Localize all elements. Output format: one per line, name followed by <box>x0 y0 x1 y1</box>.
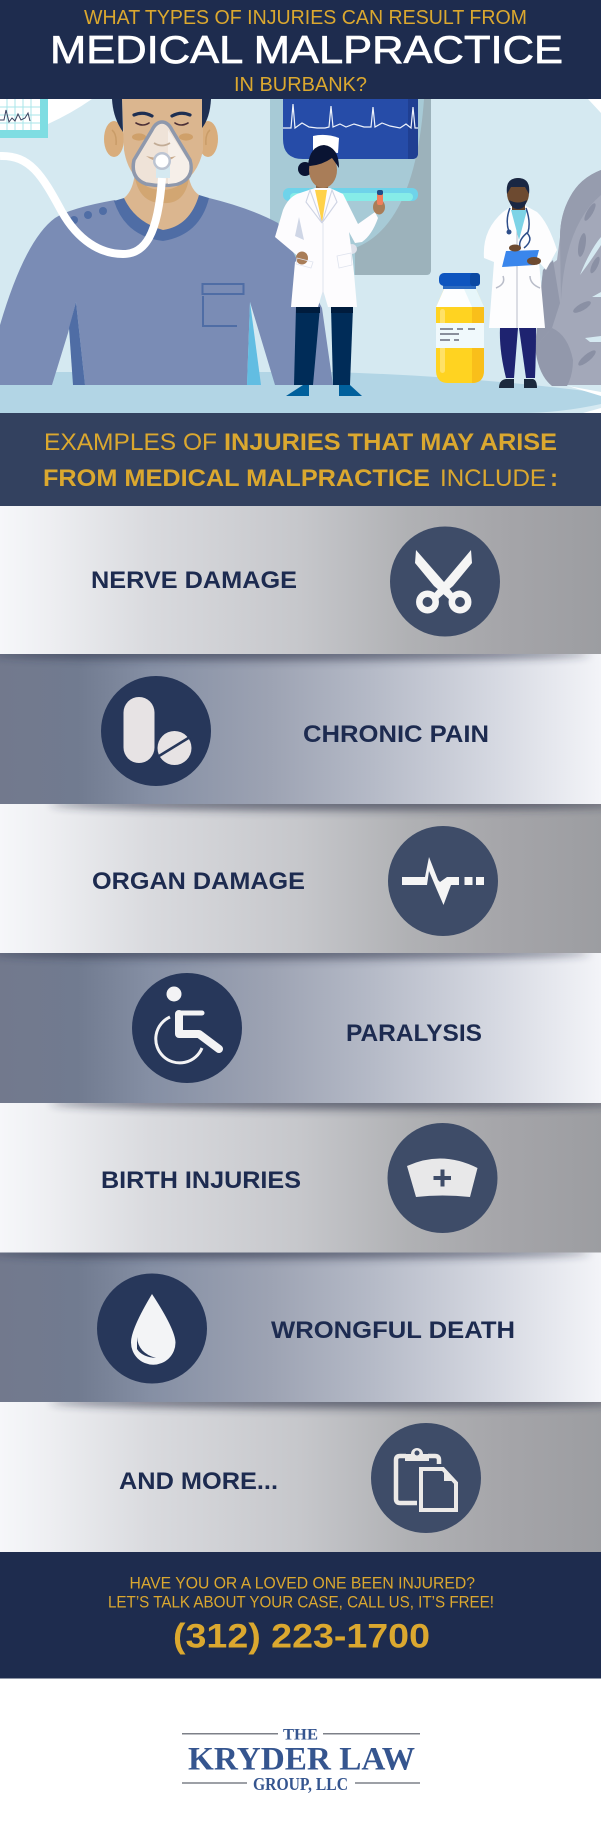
heading line one: EXAMPLES OF <box>44 429 217 456</box>
illustration: hospital scene <box>0 99 601 413</box>
band: organ damage <box>0 798 601 953</box>
label: chronic pain: CHRONIC PAIN <box>303 721 489 748</box>
label: and more: AND MORE... <box>119 1468 278 1495</box>
band: nerve damage <box>0 506 601 654</box>
label: birth injuries: BIRTH INJURIES <box>101 1167 301 1194</box>
doctor <box>484 178 557 388</box>
band: paralysis <box>0 947 601 1103</box>
oxygen tube <box>0 156 162 254</box>
band: chronic pain <box>0 648 601 804</box>
wall chart: ECG <box>0 99 48 138</box>
icon: blood drop <box>97 1274 207 1384</box>
nurse <box>275 135 385 396</box>
section heading panel: INJURIES THAT MAY ARISE <box>224 429 557 456</box>
nurse neck and face <box>316 186 328 188</box>
cyan shelf <box>283 188 418 201</box>
header banner <box>0 0 601 99</box>
icon: nurse hat <box>388 1123 498 1233</box>
heading line two: FROM MEDICAL MALPRACTICE <box>43 465 430 492</box>
footer call to action: LET’S TALK ABOUT YOUR CASE, CALL US, IT’S FREE! <box>108 1594 494 1612</box>
logo: The Kryder Law Group <box>182 1726 420 1794</box>
logo: The Kryder Law Group: GROUP, LLC <box>253 1774 348 1794</box>
monitor wall panel <box>270 99 431 275</box>
shoulder dots <box>99 207 107 215</box>
clipboard <box>502 250 539 267</box>
band: wrongful death <box>0 1246 601 1402</box>
nurse yellow shirt <box>315 190 327 223</box>
patient eyes and brows <box>134 113 190 125</box>
patient ears and head <box>104 121 124 157</box>
label: paralysis: PARALYSIS <box>346 1020 482 1047</box>
section heading panel <box>0 413 601 506</box>
doctor pants <box>500 328 518 378</box>
floor <box>0 372 601 413</box>
monitor ECG trace <box>283 104 418 128</box>
monitor screen <box>283 99 418 159</box>
title: medical malpractice: MEDICAL MALPRACTICE <box>50 29 563 72</box>
icon: pills <box>101 676 211 786</box>
phone number: (312) 223-1700 <box>173 1618 430 1656</box>
band: birth injuries <box>0 1097 601 1252</box>
doctor head <box>512 205 525 210</box>
section heading panel: INCLUDE <box>440 465 546 492</box>
logo: The Kryder Law Group: KRYDER LAW <box>188 1741 415 1777</box>
label: nerve damage: NERVE DAMAGE <box>91 567 297 594</box>
nurse shoes <box>286 385 309 396</box>
icon: wheelchair <box>132 973 242 1083</box>
patient <box>0 99 333 385</box>
bottle cap <box>443 286 476 289</box>
title line: in Burbank: IN BURBANK? <box>234 74 367 96</box>
shirt pocket <box>202 284 244 326</box>
label: organ damage: ORGAN DAMAGE <box>92 868 305 895</box>
bottle label <box>436 323 484 348</box>
nurse hair bun <box>298 162 310 176</box>
oxygen mask <box>133 122 191 186</box>
doctor coat <box>484 206 557 328</box>
icon: scissors <box>390 526 500 636</box>
nurse cap <box>313 135 339 153</box>
title line: what types of injuries: WHAT TYPES OF INJURIES CAN RESULT FROM <box>84 7 527 29</box>
footer call to action <box>0 1552 601 1678</box>
band: and more <box>0 1396 601 1552</box>
patient collar <box>114 195 209 241</box>
call to action text: HAVE YOU OR A LOVED ONE BEEN INJURED? <box>130 1574 475 1592</box>
nurse hands and pen <box>296 252 308 264</box>
stethoscope <box>507 208 530 248</box>
icon: heartbeat <box>388 826 498 936</box>
medicine bottle <box>436 273 484 383</box>
plant <box>535 170 601 396</box>
patient shirt <box>0 198 333 385</box>
section heading panel: : <box>550 465 558 492</box>
nurse coat <box>275 188 378 307</box>
logo: The Kryder Law Group: THE <box>283 1726 318 1743</box>
label: wrongful death: WRONGFUL DEATH <box>271 1317 515 1344</box>
nurse pants <box>294 307 320 385</box>
doctor shoes <box>499 379 514 388</box>
icon: clipboard and document <box>371 1423 481 1533</box>
